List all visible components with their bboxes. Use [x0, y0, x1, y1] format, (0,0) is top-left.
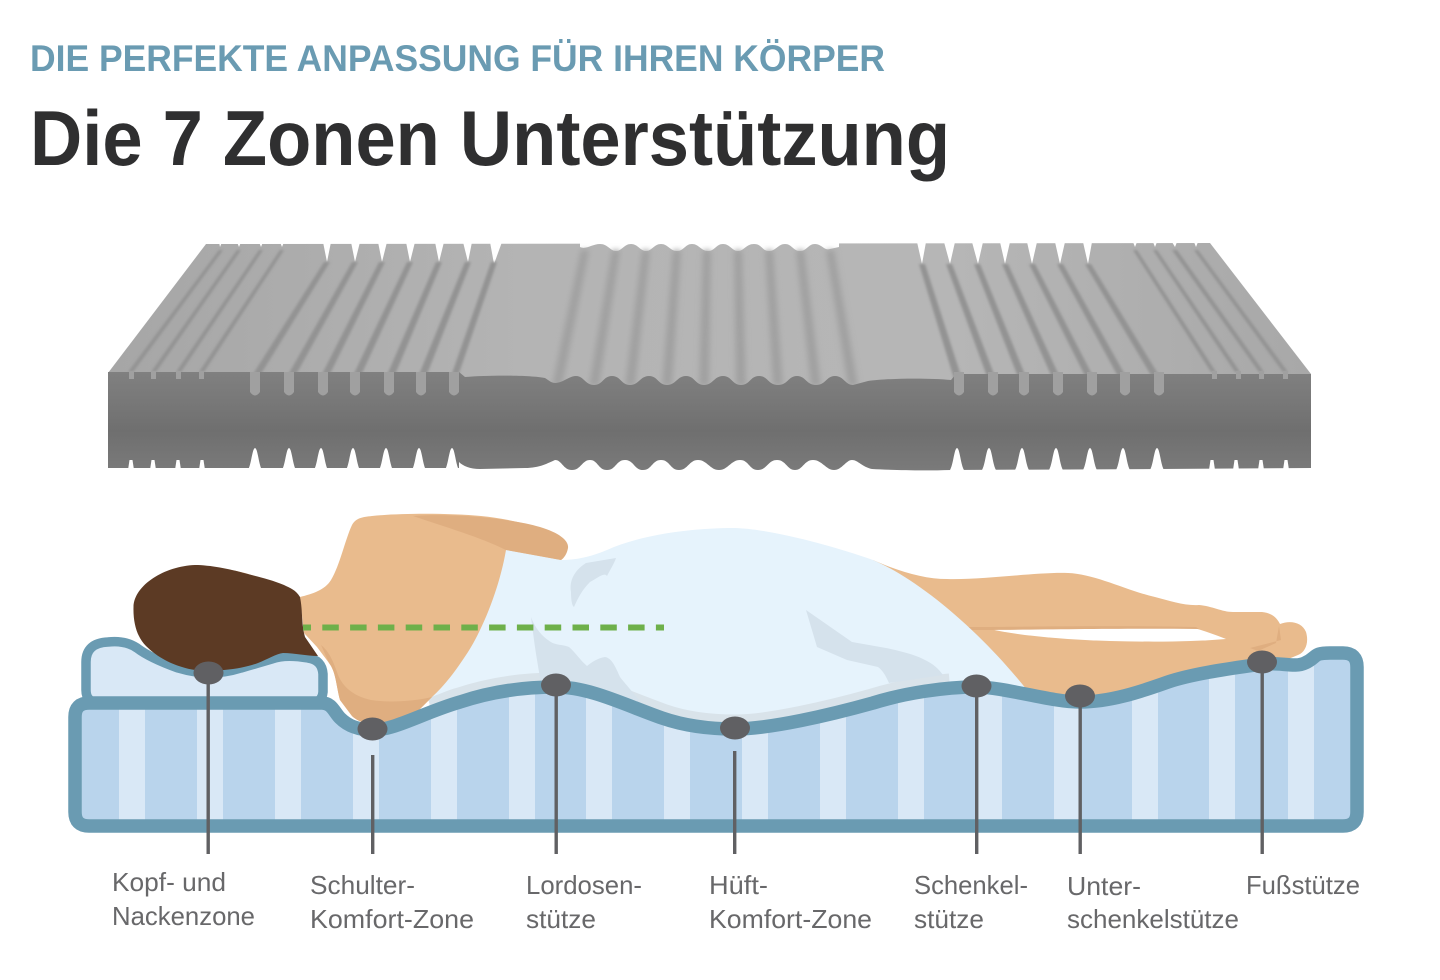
spine alignment line — [303, 624, 664, 630]
wave zone soft ridges — [552, 250, 858, 386]
torso lower shadow — [321, 645, 432, 726]
label: Kopf- und Nackenzone: Kopf- und — [112, 867, 226, 897]
back edge wave cut-out — [580, 238, 839, 251]
label: Hüft-Komfort-Zone — [709, 870, 872, 934]
torso and arm — [300, 514, 567, 726]
label: Schulter-Komfort-Zone — [310, 870, 474, 934]
front top groove slots — [250, 372, 260, 396]
zone marker: head and neck — [194, 662, 224, 854]
mattress body with stripes — [82, 660, 1350, 820]
label: Schulter-Komfort-Zone: Schulter- — [310, 870, 415, 900]
top surface grooves — [128, 250, 1288, 382]
label: Lordosenstütze — [526, 870, 642, 934]
eyebrow heading: DIE PERFEKTE ANPASSUNG FÜR IHREN KÖRPER — [30, 38, 885, 79]
label: Unterschenkelstütze — [1067, 871, 1239, 934]
label: Kopf- und Nackenzone: Nackenzone — [112, 901, 255, 931]
arm shadow — [413, 515, 568, 560]
3D foam mattress with seven zones — [108, 238, 1311, 470]
zone marker: lower leg — [1065, 684, 1095, 854]
mattress top surface — [108, 243, 1311, 395]
zone marker: foot — [1247, 650, 1277, 854]
face sliver — [225, 569, 268, 582]
band along mattress surface — [432, 687, 950, 729]
label: Kopf- und Nackenzone — [112, 867, 255, 931]
pillow — [86, 642, 323, 703]
label: Schulter-Komfort-Zone: Komfort-Zone — [310, 904, 474, 934]
hair — [133, 565, 318, 671]
label: Unterschenkelstütze: schenkelstütze — [1067, 904, 1239, 934]
zone marker: shoulder — [358, 718, 388, 854]
legs — [874, 560, 1308, 694]
leg shadow line — [968, 626, 1281, 651]
label: Hüft-Komfort-Zone: Hüft- — [709, 870, 768, 900]
back edge notches — [219, 242, 1198, 264]
label: Schenkelstütze: Schenkel- — [914, 870, 1028, 900]
label: Hüft-Komfort-Zone: Komfort-Zone — [709, 904, 872, 934]
zone marker: lordosis — [541, 674, 571, 854]
diagram: person lying on mattress — [60, 514, 1370, 840]
shirt — [429, 528, 1024, 714]
front bottom notches — [248, 448, 262, 470]
label: Lordosenstütze: stütze — [526, 904, 596, 934]
gap between legs — [990, 627, 1226, 642]
shirt folds — [531, 558, 942, 691]
zone marker: thigh — [962, 674, 992, 854]
title: Die 7 Zonen Unterstützung — [30, 94, 950, 182]
zone marker: hip — [720, 716, 750, 854]
body clipped to mattress surface — [300, 514, 1307, 740]
label: Schenkelstütze: stütze — [914, 904, 984, 934]
label: Unterschenkelstütze: Unter- — [1067, 871, 1141, 901]
mattress outline — [75, 653, 1357, 826]
label: Schenkelstütze — [914, 870, 1028, 934]
label: Lordosenstütze: Lordosen- — [526, 870, 642, 900]
label: Fußstütze: Fußstütze — [1246, 870, 1360, 900]
mattress front face — [108, 372, 1311, 470]
